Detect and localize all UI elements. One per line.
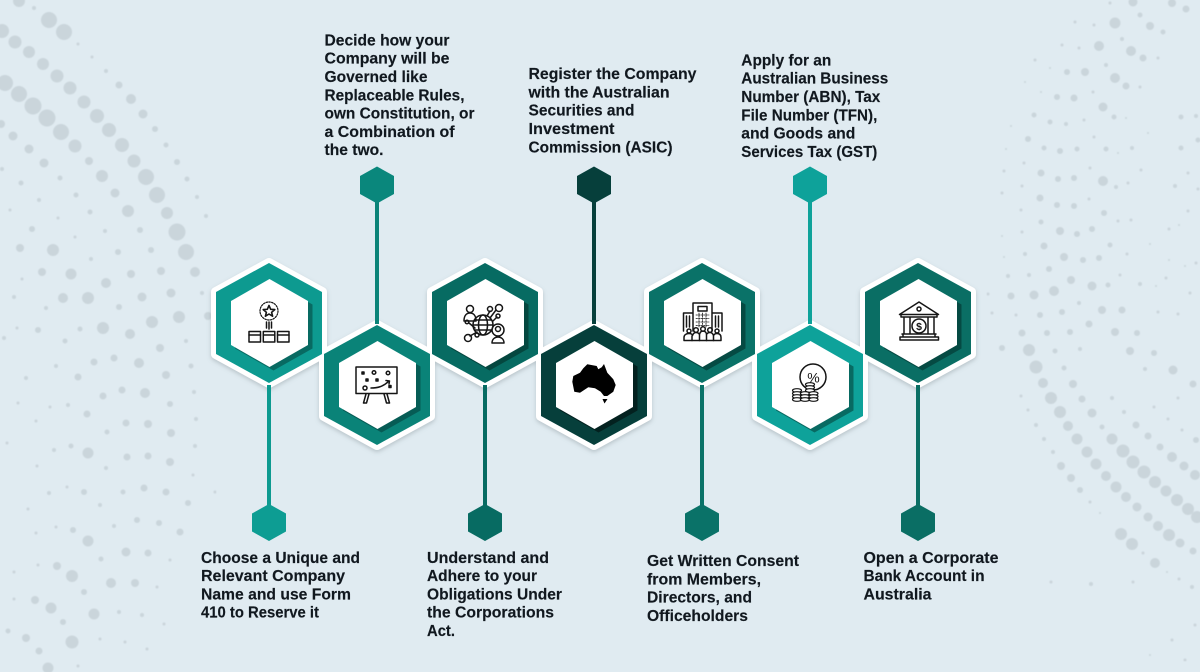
connector line [375, 200, 379, 324]
inner white hexagon [664, 279, 741, 367]
marker hexagon [685, 504, 719, 541]
text: step 2: Replaceable Rules, [324, 87, 464, 104]
inner white hexagon [447, 279, 524, 367]
text: step 5: Get Written Consent [647, 553, 799, 570]
connector line [592, 200, 596, 324]
inner shadow [451, 282, 528, 370]
text: step 5: from Members, [647, 571, 761, 588]
step 3: obligations [427, 263, 562, 640]
icon: medal and boxes [249, 302, 289, 342]
main hexagon [216, 263, 322, 383]
connector line [267, 385, 271, 507]
text: step 6: File Number (TFN), [741, 107, 877, 124]
main hexagon [649, 263, 755, 383]
icon: coins and percent [792, 364, 826, 401]
icon: bank [900, 302, 938, 340]
text: step 3: Act. [427, 623, 455, 640]
text: step 6: Australian Business [741, 71, 888, 88]
text: step 7: Bank Account in [864, 568, 984, 585]
icon: global network [464, 304, 504, 343]
main hexagon [541, 325, 647, 445]
step 2: governance [324, 32, 474, 445]
text: step 3: the Corporations [427, 604, 554, 622]
connector line [916, 385, 920, 507]
marker hexagon [577, 166, 611, 204]
text: step 2: Decide how your [324, 32, 450, 50]
icon: bank: $ [916, 321, 922, 333]
text: step 2: the two. [324, 142, 384, 159]
text: step 6: Apply for an [741, 52, 831, 69]
white hexagon outlines [216, 263, 971, 445]
icon: office building and people [684, 303, 722, 340]
connector line [483, 385, 487, 507]
text: step 4: Investment [528, 121, 614, 138]
main hexagon [865, 263, 971, 383]
text: step 1: Relevant Company [201, 568, 345, 585]
inner shadow [668, 282, 746, 370]
marker hexagon [360, 166, 394, 204]
text: step 7: Australia [864, 586, 932, 603]
marker hexagon [468, 504, 502, 541]
text: step 1: Name and use Form [201, 586, 351, 604]
text: step 4: with the Australian [527, 84, 670, 101]
text: step 2: a Combination of [324, 124, 455, 141]
connector line [700, 385, 704, 507]
text: step 6: Number (ABN), Tax [741, 89, 881, 106]
step 6: ABN, TFN and GST [741, 52, 888, 445]
text: step 5: Directors, and [647, 590, 752, 607]
connector line [808, 200, 812, 324]
main hexagon [324, 325, 430, 445]
inner shadow [343, 344, 420, 432]
inner shadow [884, 282, 962, 370]
text: step 6: and Goods and [741, 126, 855, 143]
text: step 4: Securities and [528, 103, 634, 120]
icon: strategy board [356, 367, 397, 403]
step 4: register with ASIC [527, 66, 697, 445]
main hexagon [432, 263, 538, 383]
text: step 3: Adhere to your [427, 568, 537, 585]
inner white hexagon [231, 279, 308, 367]
marker hexagon [793, 166, 827, 204]
step 1: company name [201, 263, 360, 622]
text: step 2: Company will be [324, 51, 450, 68]
text: step 7: Open a Corporate [864, 550, 999, 567]
inner white hexagon [339, 341, 416, 429]
text: step 4: Register the Company [528, 66, 697, 83]
text: step 1: Choose a Unique and [201, 550, 360, 567]
halftone dots left [0, 0, 216, 672]
text: step 6: Services Tax (GST) [741, 144, 877, 161]
text: step 5: Officeholders [647, 608, 748, 625]
icon: coins and percent: % [807, 370, 820, 386]
inner shadow [235, 282, 312, 370]
main hexagon [757, 325, 863, 445]
text: step 2: Governed like [324, 69, 428, 86]
text: step 1: 410 to Reserve it [201, 604, 319, 622]
icon: map of Australia [572, 364, 616, 404]
marker hexagon [901, 504, 935, 541]
inner white hexagon [556, 341, 633, 429]
marker hexagon [252, 504, 286, 541]
inner white hexagon [880, 279, 957, 367]
halftone dots right [986, 0, 1200, 662]
text: step 2: own Constitution, or [324, 106, 474, 122]
text: step 3: Obligations Under [427, 586, 562, 604]
inner shadow [776, 344, 854, 432]
coin stacks [792, 383, 818, 401]
inner white hexagon [772, 341, 849, 429]
text: step 4: Commission (ASIC) [528, 139, 672, 156]
text: step 3: Understand and [427, 550, 549, 567]
step 7: bank account [864, 263, 999, 603]
inner shadow [560, 344, 638, 432]
step 5: written consent [647, 263, 799, 625]
